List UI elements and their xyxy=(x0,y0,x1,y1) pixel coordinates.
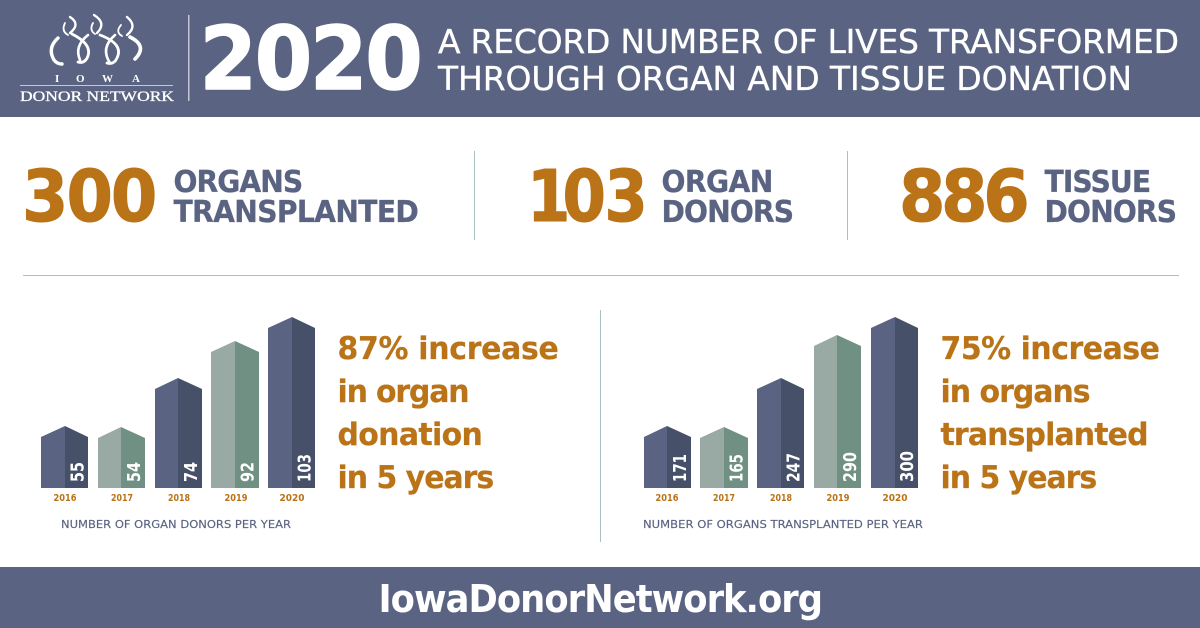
callout: 87% increase xyxy=(338,330,559,496)
bar 2020 xyxy=(871,317,918,504)
title xyxy=(437,22,1179,98)
stat: tissue donors: TISSUE xyxy=(1044,164,1151,199)
logo text: IOWA: W xyxy=(102,73,113,85)
logo text: Donor Network: DONOR NETWORK xyxy=(20,89,175,105)
bar 2019: 92 xyxy=(238,462,258,482)
bar chart: organ donors per year xyxy=(41,317,316,531)
year heading: 2020 xyxy=(200,9,423,111)
stat: tissue donors: 886 xyxy=(899,156,1030,239)
stat: organ donors: 103 xyxy=(527,155,648,238)
bar 2018 xyxy=(155,378,202,504)
bar 2018: 2018 xyxy=(168,493,190,504)
bar 2020: 300 xyxy=(897,451,918,482)
bar 2018: 247 xyxy=(784,453,804,482)
stat: organs transplanted: 300 xyxy=(22,156,157,239)
stat: organs transplanted: ORGANS xyxy=(174,164,303,199)
callout: 75% increase xyxy=(940,330,1160,496)
bar 2018: 2018 xyxy=(770,493,792,504)
bar 2018: 74 xyxy=(181,462,202,482)
header band xyxy=(0,0,1200,117)
stat: organ donors: ORGAN xyxy=(662,164,773,199)
callout: 87% increase: 87% increase xyxy=(338,330,559,367)
bar 2016: 171 xyxy=(670,454,691,482)
title: A RECORD NUMBER OF LIVES TRANSFORMED xyxy=(438,22,1179,61)
bar 2020 xyxy=(268,317,316,504)
logo text: IOWA: I xyxy=(55,73,59,85)
logo text: IOWA xyxy=(55,73,140,85)
callout: 75% increase: in 5 years xyxy=(940,459,1097,496)
bar 2019: 2019 xyxy=(224,493,248,504)
stat: organs transplanted xyxy=(22,156,419,239)
stat: organ donors xyxy=(527,155,794,238)
stat: tissue donors xyxy=(899,156,1177,239)
logo: Iowa Donor Network xyxy=(20,15,175,105)
bar 2019: 290 xyxy=(840,452,861,482)
bar chart: organs transplanted per year xyxy=(643,317,923,531)
stat: organs transplanted: TRANSPLANTED xyxy=(174,194,419,229)
bar 2019: 2019 xyxy=(826,493,850,504)
bar 2016 xyxy=(41,426,88,504)
bar 2016: 55 xyxy=(68,462,88,482)
website url: IowaDonorNetwork.org xyxy=(378,577,823,621)
bar 2017: 2017 xyxy=(713,493,735,504)
stat: organ donors: DONORS xyxy=(662,194,794,229)
bar 2017 xyxy=(98,427,145,504)
bar 2019 xyxy=(211,341,259,504)
chart caption: NUMBER OF ORGANS TRANSPLANTED PER YEAR xyxy=(643,518,923,531)
footer band xyxy=(0,567,1200,628)
title: THROUGH ORGAN AND TISSUE DONATION xyxy=(437,59,1132,98)
logo text: IOWA: A xyxy=(132,73,140,85)
callout: 75% increase: 75% increase xyxy=(940,330,1160,367)
bar 2020: 2020 xyxy=(882,493,908,504)
callout: 87% increase: in organ xyxy=(338,373,470,410)
logo text: IOWA: O xyxy=(76,73,85,85)
callout: 87% increase: donation xyxy=(338,416,483,453)
callout: 75% increase: transplanted xyxy=(940,416,1149,453)
callout: 75% increase: in organs xyxy=(940,373,1091,410)
bar 2019 xyxy=(814,335,861,504)
stat: tissue donors: DONORS xyxy=(1044,194,1177,229)
bar 2018 xyxy=(757,378,804,504)
bar 2020: 103 xyxy=(294,454,316,482)
bar 2020: 2020 xyxy=(280,493,305,504)
bar 2016 xyxy=(644,426,691,504)
bar 2017: 165 xyxy=(726,454,748,482)
bar 2016: 2016 xyxy=(656,493,679,504)
chart caption: NUMBER OF ORGAN DONORS PER YEAR xyxy=(61,518,291,531)
callout: 87% increase: in 5 years xyxy=(338,459,494,496)
bar 2017: 54 xyxy=(124,462,145,482)
bar 2016: 2016 xyxy=(54,493,77,504)
icon: figures xyxy=(51,15,140,64)
bar 2017 xyxy=(700,427,748,504)
bar 2017: 2017 xyxy=(111,493,133,504)
